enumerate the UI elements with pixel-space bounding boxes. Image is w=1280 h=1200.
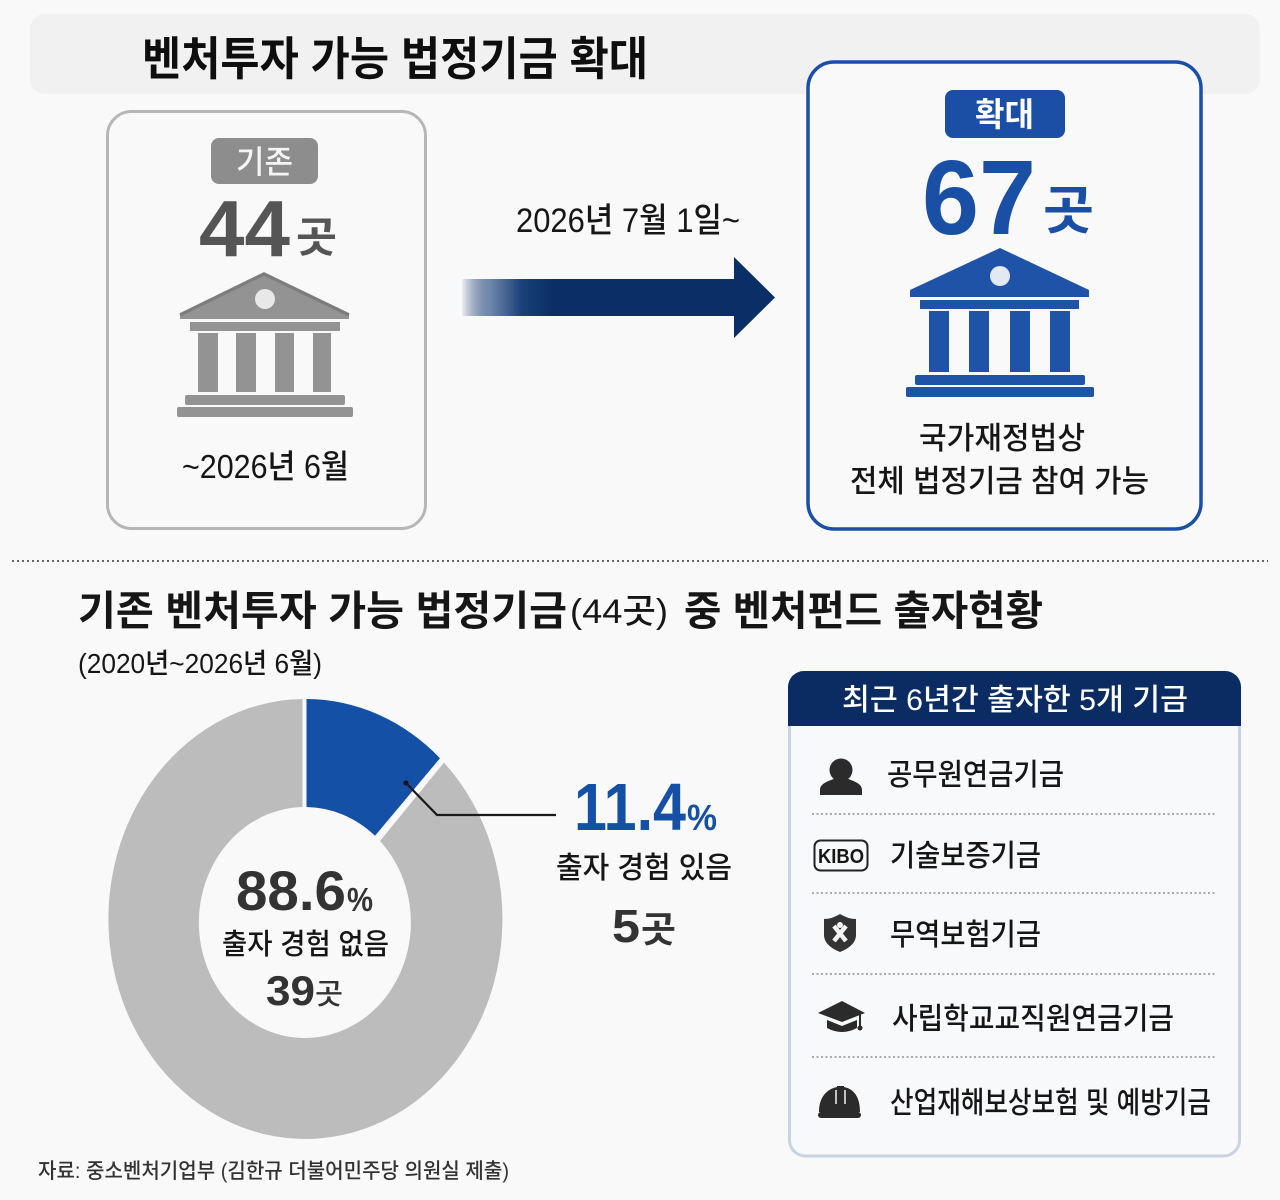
fund: 산업재해보상보험 및 예방기금: 산업재해보상보험 및 예방기금 xyxy=(890,1087,1211,1120)
leader line xyxy=(404,780,556,815)
badge: 기존 xyxy=(211,138,318,184)
center label: 출자 경험 없음 xyxy=(222,928,389,961)
description: 국가재정법상 xyxy=(919,421,1085,456)
panel: five funds list xyxy=(788,671,1241,1156)
count: 67곳: 곳 xyxy=(1043,183,1094,241)
count: 67곳 xyxy=(922,139,1094,257)
center label: 88.6 xyxy=(236,859,346,922)
section heading: (44곳) xyxy=(570,593,668,631)
callout: 11.4%: % xyxy=(687,797,717,838)
title bar xyxy=(30,14,1260,94)
count: 44곳: 44 xyxy=(199,184,291,273)
description: 전체 법정기금 참여 가능 xyxy=(850,464,1149,499)
icon: shield xyxy=(824,914,856,952)
segment: no experience 88.6% xyxy=(108,699,502,1139)
center label: 곳 xyxy=(315,979,343,1011)
icon: KIBO logo xyxy=(814,840,868,870)
callout: 11.4%: 5 xyxy=(612,900,640,952)
date label: 2026년 7월 1일~ xyxy=(516,202,740,240)
section heading: 기존 벤처투자 가능 법정기금 xyxy=(78,588,567,634)
center label xyxy=(222,859,389,1014)
icon: blue institution building xyxy=(906,248,1094,397)
icon: graduation cap xyxy=(818,1001,865,1032)
callout: 11.4%: 출자 경험 있음 xyxy=(556,852,732,885)
arrow xyxy=(462,257,775,338)
fund: 공무원연금기금: 공무원연금기금 xyxy=(887,759,1064,792)
icon: person xyxy=(820,758,862,795)
icon: gray institution building xyxy=(177,272,353,417)
center label: 39 xyxy=(266,967,315,1014)
badge: 확대 xyxy=(945,90,1065,138)
donut chart xyxy=(108,699,502,1139)
fund: 사립학교교직원연금기금: 사립학교교직원연금기금 xyxy=(892,1003,1174,1036)
callout: 11.4% xyxy=(556,770,732,952)
center label: % xyxy=(347,881,373,918)
fund: 무역보험기금: 무역보험기금 xyxy=(890,919,1041,952)
description xyxy=(850,421,1149,499)
section subheading: (2020년~2026년 6월) xyxy=(78,648,322,679)
panel: after (67 funds) xyxy=(808,62,1201,529)
icon: hard hat xyxy=(818,1086,861,1118)
count: 44곳 xyxy=(199,184,337,273)
segment: has experience 11.4% xyxy=(306,699,440,836)
section heading xyxy=(78,588,1043,634)
badge: 기존: 기존 xyxy=(236,144,293,180)
count: 67곳: 67 xyxy=(922,139,1036,257)
fund: 기술보증기금: 기술보증기금 xyxy=(890,840,1041,873)
count: 44곳: 곳 xyxy=(296,214,337,261)
callout: 11.4%: 11.4 xyxy=(574,770,686,845)
icon: KIBO logo: KIBO xyxy=(818,846,864,868)
badge: 확대: 확대 xyxy=(975,96,1034,133)
callout: 11.4%: 곳 xyxy=(641,909,676,950)
section heading: 중 벤처펀드 출자현황 xyxy=(684,588,1043,634)
title bar: 벤처투자 가능 법정기금 확대 xyxy=(142,33,648,85)
period label: ~2026년 6월 xyxy=(182,448,349,485)
panel header: 최근 6년간 출자한 5개 기금 xyxy=(842,684,1188,717)
panel: before (44 funds) xyxy=(108,112,426,528)
source note: 자료: 중소벤처기업부 (김한규 더불어민주당 의원실 제출) xyxy=(38,1160,509,1183)
panel header xyxy=(788,671,1241,726)
